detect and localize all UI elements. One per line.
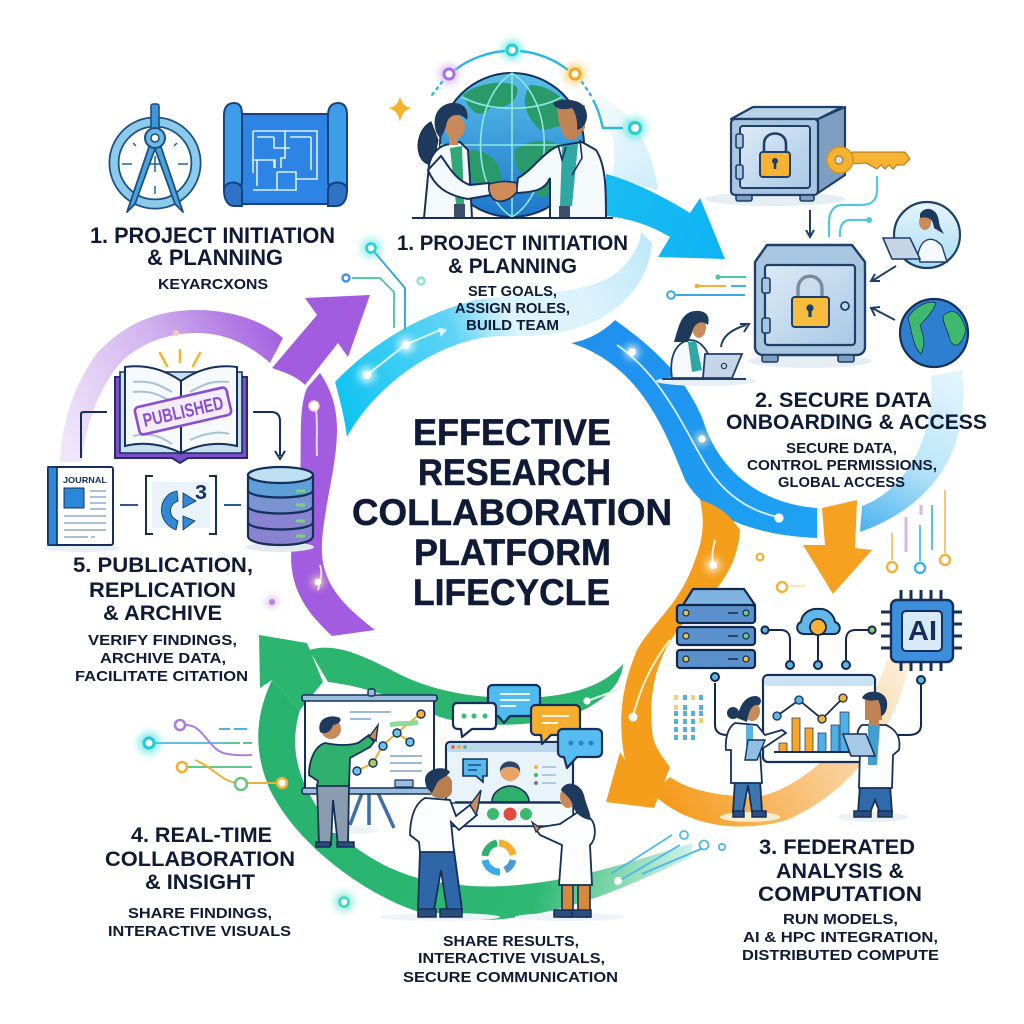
- heading: step 1 center: SET GOALS,: [468, 283, 557, 300]
- heading: step 3: RUN MODELS,: [783, 911, 898, 928]
- arc: pale blue around header: [600, 95, 658, 190]
- icon: server rack: [677, 589, 755, 668]
- heading: step 2: SECURE DATA,: [786, 440, 897, 457]
- arc: blue wave: [571, 320, 817, 538]
- arc: purple flow down: [291, 373, 375, 636]
- heading: step 3: ANALYSIS &: [776, 859, 904, 883]
- heading: step 5: & ARCHIVE: [103, 601, 222, 625]
- heading: step 5: VERIFY FINDINGS,: [88, 632, 237, 649]
- heading: step 5: FACILITATE CITATION: [75, 668, 248, 685]
- heading: step 5: REPLICATION: [89, 578, 236, 602]
- speed lines: [667, 274, 746, 299]
- burst lines: [160, 350, 200, 366]
- heading: step 4: INTERACTIVE VISUALS: [108, 923, 291, 940]
- arrow: orange down: [803, 500, 872, 594]
- heading: step 2: 2. SECURE DATA: [755, 388, 932, 412]
- icon: journal: JOURNAL: [63, 475, 107, 485]
- whiteboard: [302, 689, 437, 828]
- icon: database: [246, 467, 314, 552]
- circuit nodes near step 1 text: [342, 238, 447, 383]
- figure: woman scientist: [515, 784, 625, 921]
- heading: step 2: ONBOARDING & ACCESS: [726, 410, 987, 434]
- icon: AI chip: AI: [908, 615, 937, 646]
- arc: orange sweep arrow: [606, 500, 740, 808]
- title: PLATFORM: [414, 532, 611, 573]
- title: LIFECYCLE: [413, 572, 610, 613]
- heading: step 1 left: [90, 223, 335, 293]
- arc: green upper band: [309, 648, 623, 725]
- decorative dot matrix: [674, 695, 703, 740]
- blue wave nodes: [617, 345, 784, 523]
- icon: main safe: [748, 245, 872, 368]
- heading: step 1 left: & PLANNING: [147, 245, 283, 270]
- green band node: [583, 690, 622, 885]
- icon: citation C3: 3: [195, 482, 207, 504]
- panel: top left planning icons: [114, 103, 347, 212]
- icon: blueprint: [224, 103, 347, 206]
- icon: compass: [114, 104, 196, 212]
- decorative network nodes: [432, 40, 646, 139]
- heading: step 1 left: KEYARCXONS: [158, 276, 268, 293]
- panel: federated analysis icons: [629, 490, 962, 822]
- heading: step 3: [742, 835, 939, 964]
- lifecycle flow arrows: [60, 95, 964, 920]
- circuit lines on green band: [611, 831, 725, 884]
- icon: journal: [44, 467, 120, 552]
- arc: pale purple sweep: [60, 310, 283, 462]
- heading: step 4: COLLABORATION: [105, 847, 295, 871]
- heading: step 5: [73, 553, 253, 685]
- dashes: [120, 504, 241, 506]
- stamp: published: PUBLISHED: [141, 393, 226, 432]
- icon: sparkle: [388, 96, 412, 122]
- icon: handshake: [489, 181, 517, 201]
- connector lines: [711, 626, 925, 735]
- purple band nodes: [173, 330, 324, 608]
- text: bottom center summary: INTERACTIVE VISUALS,: [418, 950, 605, 967]
- arrow: avatar to safe: [871, 266, 896, 281]
- arrow: purple upward: [272, 295, 370, 385]
- heading: step 5: ARCHIVE DATA,: [100, 650, 226, 667]
- heading: step 5: 5. PUBLICATION,: [73, 553, 253, 577]
- icon: key: [827, 147, 910, 173]
- icon: top safe: [705, 107, 845, 206]
- icon: cloud: [797, 609, 840, 660]
- arc: green lower band: [258, 680, 693, 920]
- connector: book to database: [253, 412, 285, 459]
- heading: step 3: DISTRIBUTED COMPUTE: [742, 947, 939, 964]
- figure: woman at laptop: [656, 311, 756, 386]
- arc: cyan from purple to initiation: [335, 232, 652, 437]
- chat bubbles: [453, 685, 602, 768]
- title: COLLABORATION: [352, 492, 672, 533]
- panel: publication icons: [44, 330, 324, 608]
- heading: step 2: [726, 388, 987, 491]
- panel: real-time collaboration illustration: [302, 685, 625, 921]
- arc: orange lower loop: [652, 660, 910, 827]
- figure: man scientist: [516, 100, 606, 218]
- heading: step 2: CONTROL PERMISSIONS,: [747, 457, 937, 474]
- ground line: [412, 217, 613, 219]
- text: bottom center summary: SHARE RESULTS,: [443, 933, 579, 950]
- title: RESEARCH: [418, 452, 611, 493]
- text: bottom center summary: SECURE COMMUNICATION: [403, 969, 618, 986]
- icon: small globe: [900, 299, 968, 367]
- heading: step 4: & INSIGHT: [145, 870, 255, 894]
- heading: step 1 center: 1. PROJECT INITIATION: [397, 231, 628, 255]
- data lines: [829, 176, 877, 237]
- avatar: researcher in circle: [883, 202, 960, 268]
- video call window: [446, 742, 573, 826]
- arrow: bright cyan to secure data: [606, 174, 725, 259]
- heading: step 3: 3. FEDERATED: [759, 835, 915, 859]
- heading: step 1 left: 1. PROJECT INITIATION: [90, 223, 335, 248]
- figure: man scientist with tablet: [838, 692, 908, 822]
- panel: secure data icons: [617, 107, 968, 523]
- data nodes: [629, 490, 950, 721]
- icon: open book: [115, 366, 247, 463]
- figure: woman scientist: [418, 103, 491, 218]
- arrow: down to main safe: [806, 210, 814, 237]
- icon: AI chip: [881, 590, 962, 671]
- title: [352, 412, 672, 613]
- text: bottom center summary: [403, 933, 618, 986]
- heading: step 3: COMPUTATION: [758, 882, 922, 906]
- figure: presenter: [309, 716, 379, 847]
- heading: step 1 center: ASSIGN ROLES,: [455, 300, 570, 317]
- heading: step 4: SHARE FINDINGS,: [128, 905, 272, 922]
- icon: citation C3: [146, 476, 216, 534]
- heading: step 3: AI & HPC INTEGRATION,: [743, 929, 938, 946]
- arc: pale ring to onboarding: [860, 370, 964, 532]
- icon: globe: [440, 73, 584, 217]
- illustration: handshake over globe: [412, 40, 646, 218]
- title: EFFECTIVE: [413, 412, 611, 453]
- chart: donut: [485, 843, 513, 872]
- circuit lines left of step 4: [138, 720, 354, 912]
- heading: step 1 center: [397, 231, 628, 334]
- chart board: [763, 675, 875, 762]
- arrow: green head: [259, 635, 323, 710]
- heading: step 4: 4. REAL-TIME: [131, 823, 272, 847]
- arrow: globe to safe: [871, 307, 895, 320]
- connector: journal to book: [81, 412, 107, 458]
- heading: step 4: [105, 823, 295, 940]
- heading: step 1 center: BUILD TEAM: [466, 317, 559, 334]
- figure: woman scientist with tablet: [720, 696, 786, 822]
- figure: man pointing: [380, 768, 500, 921]
- heading: step 2: GLOBAL ACCESS: [778, 474, 905, 491]
- heading: step 1 center: & PLANNING: [448, 254, 577, 278]
